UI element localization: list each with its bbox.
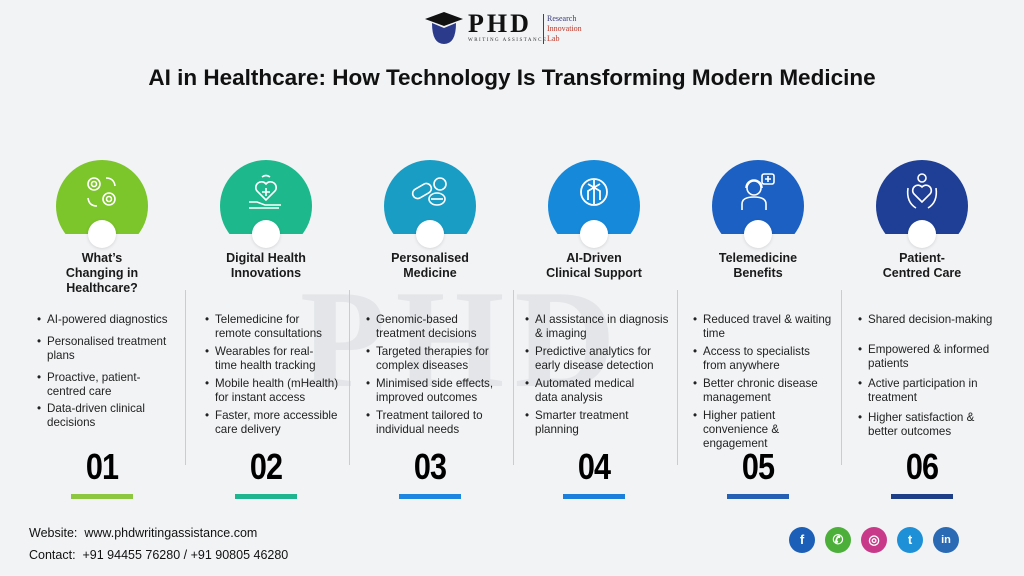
- bullets col6: [858, 313, 992, 438]
- text: Data-driven clinical decisions: [47, 402, 145, 429]
- dome 3: [384, 160, 476, 234]
- logo: WRITING ASSISTANCE: [468, 38, 548, 43]
- text: Mobile health (mHealth) for instant access: [215, 377, 338, 404]
- text: Genomic-based treatment decisions: [376, 313, 477, 340]
- text: AI-Driven: [566, 251, 622, 265]
- text: Digital Health: [226, 251, 306, 265]
- text: AI assistance in diagnosis & imaging: [535, 313, 668, 340]
- text: Targeted therapies for complex diseases: [376, 345, 489, 372]
- text: Shared decision-making: [868, 313, 992, 326]
- text: Access to specialists from anywhere: [703, 345, 810, 372]
- text: Telemedicine for remote consultations: [215, 313, 322, 340]
- text: 05: [742, 446, 774, 487]
- dome 6: [876, 160, 968, 234]
- social icons: in: [941, 534, 951, 546]
- logo: Lab: [547, 34, 559, 43]
- text: Personalised treatment plans: [47, 335, 166, 362]
- text: Predictive analytics for early disease detection: [535, 345, 654, 372]
- bullets col1: [38, 313, 168, 429]
- social icons: f: [800, 532, 804, 547]
- text: 06: [906, 446, 938, 487]
- text: Benefits: [733, 266, 783, 280]
- bars: [71, 494, 133, 499]
- text: Smarter treatment planning: [535, 409, 628, 436]
- text: Reduced travel & waiting time: [703, 313, 831, 340]
- dividers: [185, 290, 186, 465]
- logo: PHD: [468, 9, 532, 38]
- bullets col4: [526, 313, 668, 436]
- social icons: ◎: [868, 532, 880, 547]
- text: Wearables for real-time health tracking: [215, 345, 316, 372]
- bullets col2: [206, 313, 338, 436]
- headings: [66, 251, 138, 295]
- text: Proactive, patient-centred care: [47, 371, 140, 398]
- contact info: [29, 526, 288, 562]
- text: Better chronic disease management: [703, 377, 818, 404]
- contact info: Website: www.phdwritingassistance.com: [29, 526, 257, 540]
- text: 02: [250, 446, 282, 487]
- text: Medicine: [403, 266, 457, 280]
- watermark: PHD: [300, 262, 626, 417]
- title: AI in Healthcare: How Technology Is Transforming Modern Medicine: [148, 65, 876, 90]
- dome 1: [56, 160, 148, 234]
- social icons: t: [908, 532, 912, 547]
- text: 03: [414, 446, 446, 487]
- dome 2: [220, 160, 312, 234]
- text: Clinical Support: [546, 266, 642, 280]
- text: Automated medical data analysis: [535, 377, 634, 404]
- text: Personalised: [391, 251, 469, 265]
- headings: What’s: [82, 251, 122, 265]
- text: Higher satisfaction & better outcomes: [868, 411, 974, 438]
- text: Treatment tailored to individual needs: [376, 409, 483, 436]
- text: Centred Care: [883, 266, 961, 280]
- text: Minimised side effects, improved outcomes: [376, 377, 493, 404]
- text: AI-powered diagnostics: [47, 313, 168, 326]
- text: 04: [578, 446, 610, 487]
- text: Faster, more accessible care delivery: [215, 409, 337, 436]
- text: Innovations: [231, 266, 301, 280]
- text: Empowered & informed patients: [868, 343, 989, 370]
- bullets col5: [694, 313, 831, 450]
- text: Higher patient convenience & engagement: [703, 409, 779, 450]
- logo: [425, 9, 582, 44]
- text: Patient-: [899, 251, 945, 265]
- dome 5: [712, 160, 804, 234]
- social icons: ✆: [833, 532, 843, 547]
- text: Active participation in treatment: [868, 377, 978, 404]
- logo: Research: [547, 14, 576, 23]
- dome 4: [548, 160, 640, 234]
- bullets col3: [366, 313, 493, 436]
- numbers: 01: [86, 446, 118, 487]
- headings: Changing in: [66, 266, 138, 280]
- logo: Innovation: [547, 24, 582, 33]
- headings: Healthcare?: [66, 281, 138, 295]
- text: Telemedicine: [719, 251, 797, 265]
- contact info: Contact: +91 94455 76280 / +91 90805 46280: [29, 548, 288, 562]
- social icons: [789, 527, 959, 553]
